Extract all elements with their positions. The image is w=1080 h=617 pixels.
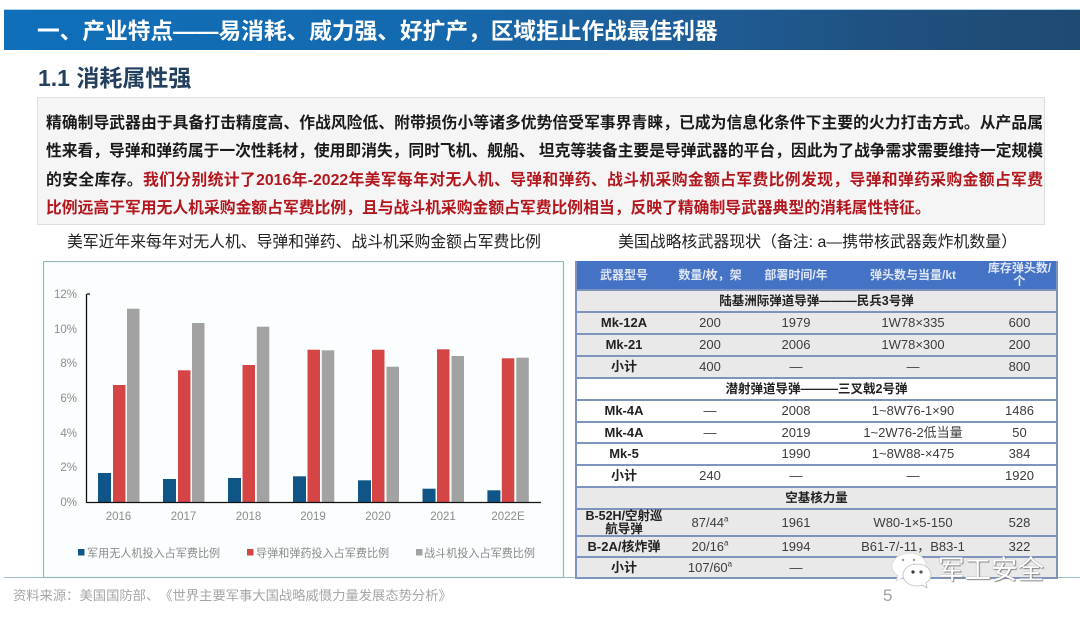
- nuclear weapons table: —: [790, 560, 802, 575]
- legend: 导弹和弹药投入占军费比例: [256, 546, 389, 560]
- legend: 军用无人机投入占军费比例: [87, 546, 220, 560]
- nuclear weapons table: 航导弹: [605, 522, 643, 536]
- fighter share bars: [127, 309, 529, 502]
- nuclear weapons table: Mk-12A: [601, 315, 647, 330]
- x axis labels: 2018: [236, 511, 261, 523]
- nuclear weapons table: 2006: [782, 337, 810, 352]
- y axis labels: 6%: [60, 393, 77, 405]
- nuclear weapons table: 87/44a: [692, 514, 728, 530]
- y axis labels: 2%: [60, 462, 77, 474]
- nuclear weapons table: 1~8W76-1×90: [872, 403, 954, 418]
- legend: [78, 546, 535, 560]
- nuclear weapons table: 弹头数与当量/kt: [870, 268, 956, 282]
- summary paragraph: 精确制导武器由于具备打击精度高、作战风险低、附带损伤小等诸多优势倍受军事界青睐，已成为信息化条件下主要的火力打击方式。从产品属: [46, 115, 1043, 132]
- nuclear weapons table: 528: [1009, 514, 1030, 530]
- y axis labels: 0%: [60, 497, 77, 509]
- watermark: [892, 552, 1044, 589]
- axes: [86, 294, 541, 502]
- nuclear weapons table: 1920: [1005, 468, 1034, 483]
- nuclear weapons table: 1990: [782, 446, 810, 461]
- table caption: 美国战略核武器现状（备注: a—携带核武器轰炸机数量）: [618, 234, 1017, 251]
- nuclear weapons table: 2019: [782, 424, 810, 440]
- nuclear weapons table: 1W78×335: [881, 315, 945, 330]
- drone share bars: [98, 473, 500, 502]
- section heading: 1.1 消耗属性强: [38, 65, 191, 91]
- nuclear weapons table: —: [906, 468, 920, 483]
- nuclear weapons table: 1979: [782, 315, 810, 330]
- x axis labels: 2022E: [491, 511, 525, 523]
- nuclear weapons table: 600: [1009, 315, 1030, 330]
- x axis labels: 2020: [365, 511, 391, 523]
- summary paragraph: [46, 114, 1043, 217]
- nuclear weapons table: —: [704, 424, 716, 440]
- y axis labels: [54, 289, 77, 509]
- nuclear weapons table: 322: [1009, 538, 1030, 554]
- nuclear weapons table: 107/60a: [688, 560, 732, 575]
- nuclear weapons table: —: [790, 468, 802, 483]
- y axis labels: 12%: [54, 289, 77, 301]
- nuclear weapons table: Mk-4A: [604, 403, 644, 418]
- nuclear weapons table: 1W78×300: [881, 337, 945, 352]
- y axis labels: 4%: [60, 428, 77, 440]
- nuclear weapons table: 800: [1009, 359, 1030, 374]
- nuclear weapons table: W80-1×5-150: [873, 514, 953, 530]
- nuclear weapons table: 20/16a: [692, 538, 728, 554]
- nuclear weapons table: 384: [1009, 446, 1030, 461]
- nuclear weapons table: Mk-4A: [604, 424, 644, 440]
- icon: wechat bubbles: [892, 552, 932, 589]
- nuclear weapons table: 个: [1013, 274, 1026, 288]
- chart caption: 美军近年来每年对无人机、导弹和弹药、战斗机采购金额占军费比例: [67, 234, 541, 251]
- nuclear weapons table: 200: [699, 337, 721, 352]
- nuclear weapons table: 陆基洲际弹道导弹———民兵3号弹: [719, 294, 914, 308]
- nuclear weapons table: —: [704, 403, 716, 418]
- nuclear weapons table: 数量/枚，架: [678, 268, 742, 282]
- nuclear weapons table: 1~2W76-2低当量: [863, 424, 963, 440]
- summary paragraph: 的安全库存。我们分别统计了2016年-2022年美军每年对无人机、导弹和弹药、战斗机采购金额占军费比例发现，导弹和弹药采购金额占军费: [46, 172, 1043, 189]
- missile and munition share bars: [113, 349, 514, 502]
- nuclear weapons table: 库存弹头数/: [988, 261, 1051, 275]
- nuclear weapons table: B-2A/核炸弹: [588, 538, 660, 554]
- watermark text: 军工安全: [938, 555, 1044, 585]
- nuclear weapons table: 240: [699, 468, 721, 483]
- legend: 战斗机投入占军费比例: [424, 546, 535, 560]
- nuclear weapons table: 部署时间/年: [764, 268, 828, 282]
- y axis labels: 10%: [54, 324, 77, 336]
- x axis labels: 2019: [300, 511, 326, 523]
- nuclear weapons table: 武器型号: [600, 268, 648, 282]
- table outer frame: [575, 261, 1058, 579]
- nuclear weapons table: 潜射弹道导弹———三叉戟2号弹: [726, 382, 907, 396]
- nuclear weapons table: 1961: [782, 514, 810, 530]
- page number: 5: [883, 586, 892, 605]
- nuclear weapons table: —: [790, 359, 802, 374]
- nuclear weapons table: 空基核力量: [785, 491, 848, 505]
- nuclear weapons table: B61-7/-11，B83-1: [861, 538, 965, 554]
- nuclear weapons table: 小计: [611, 468, 637, 483]
- nuclear weapons table: Mk-5: [609, 446, 639, 461]
- x axis labels: 2021: [430, 511, 456, 523]
- bar chart panel: [43, 261, 564, 578]
- nuclear weapons table: 200: [699, 315, 721, 330]
- nuclear weapons table: [575, 261, 1058, 579]
- nuclear weapons table: 50: [1012, 424, 1027, 440]
- nuclear weapons table: Mk-21: [606, 337, 642, 352]
- y axis labels: 8%: [60, 358, 77, 370]
- summary paragraph: 性来看，导弹和弹药属于一次性耗材，使用即消失，同时飞机、舰船、 坦克等装备主要是导弹武器的平台，因此为了战争需求需要维持一定规模: [46, 143, 1043, 160]
- x axis labels: 2017: [171, 511, 196, 523]
- title banner: [4, 9, 1080, 50]
- x axis labels: [106, 511, 525, 523]
- summary paragraph: 比例远高于军用无人机采购金额占军费比例，且与战斗机采购金额占军费比例相当，反映了精确制导武器典型的消耗属性特征。: [46, 200, 931, 217]
- x axis labels: 2016: [106, 511, 131, 523]
- nuclear weapons table: B-52H/空射巡: [585, 509, 663, 523]
- summary text panel: [37, 97, 1045, 225]
- nuclear weapons table: —: [906, 359, 920, 374]
- source note: 资料来源：美国国防部、《世界主要军事大国战略威慑力量发展态势分析》: [13, 588, 452, 603]
- nuclear weapons table: 1~8W88-×475: [872, 446, 954, 461]
- nuclear weapons table: 400: [699, 359, 721, 374]
- nuclear weapons table: 2008: [782, 403, 810, 418]
- nuclear weapons table: 小计: [611, 560, 637, 575]
- nuclear weapons table: 200: [1009, 337, 1030, 352]
- nuclear weapons table: 小计: [611, 359, 637, 374]
- nuclear weapons table: 1486: [1005, 403, 1034, 418]
- nuclear weapons table: 1994: [782, 538, 810, 554]
- title text: 一、产业特点——易消耗、威力强、好扩产，区域拒止作战最佳利器: [37, 18, 718, 44]
- footer rule: [4, 577, 1080, 578]
